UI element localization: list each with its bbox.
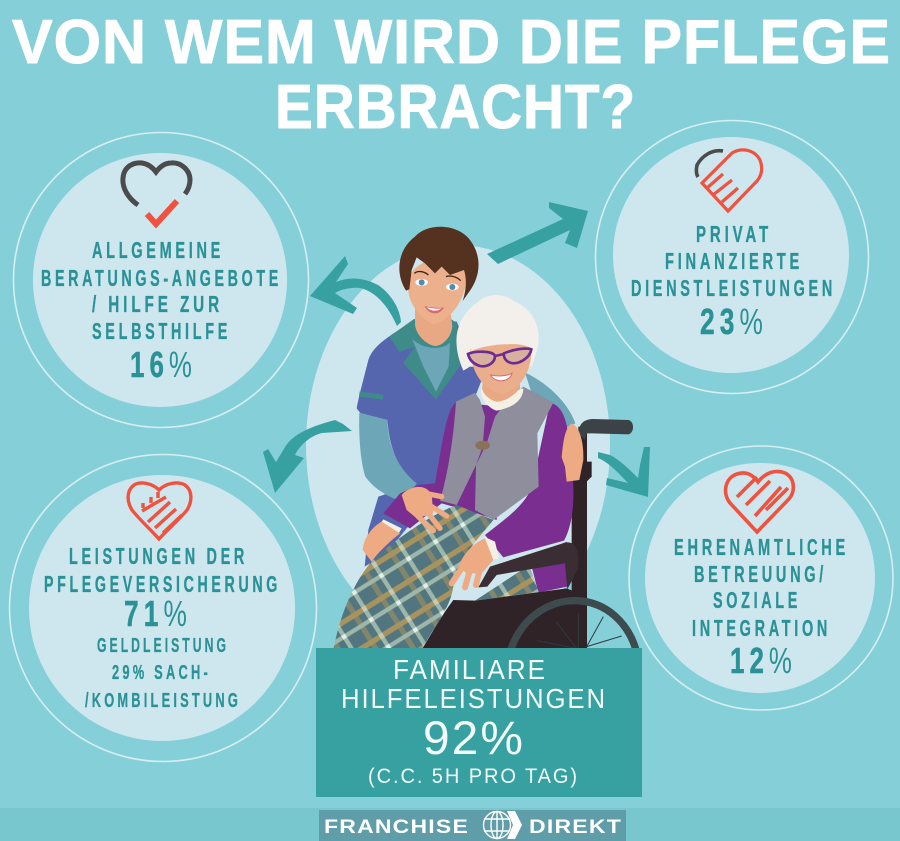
wheelchair frame <box>572 419 633 650</box>
title: ERBRACHT? <box>275 73 636 142</box>
text: privat finanzierte Dienstleistungen 23%: PRIVAT <box>696 221 772 247</box>
panel: Leistungen der Pflegeversicherung <box>10 454 316 762</box>
senior hair <box>456 295 539 371</box>
title: VON WEM WIRD DIE PFLEGE <box>12 8 891 77</box>
text: familiare Hilfeleistungen 92%: (C.C. 5H PRO TAG) <box>368 765 579 788</box>
senior blouse v and brooch <box>475 407 495 450</box>
text: privat finanzierte Dienstleistungen 23% <box>631 221 836 342</box>
text: familiare Hilfeleistungen 92%: 92% <box>423 711 525 764</box>
arrow: to lower left circle <box>263 420 352 493</box>
panel: privat finanzierte Dienstleistungen <box>596 120 868 394</box>
text: ehrenamtliche Betreuung 12% <box>674 534 849 681</box>
text: Leistungen der Pflegeversicherung 71%: 29% SACH- <box>112 662 211 684</box>
arrow: to upper left circle <box>310 256 401 326</box>
nurse sleeve band <box>359 394 383 397</box>
nurse neck <box>415 307 452 346</box>
text: Leistungen der Pflegeversicherung 71%: /KOMBILEISTUNG <box>85 690 241 712</box>
nurse face <box>408 259 467 325</box>
icon: heart with check mark <box>123 163 190 224</box>
text: allgemeine Beratungsangebote 16% <box>41 237 282 385</box>
nurse collar <box>389 319 461 399</box>
nurse right sleeve <box>525 373 575 428</box>
text: Leistungen der Pflegeversicherung 71%: PFLEGEVERSICHERUNG <box>44 571 281 597</box>
icon: heart with clasped hands <box>128 483 191 539</box>
text: allgemeine Beratungsangebote 16%: SELBSTHILFE <box>92 318 231 344</box>
logo: Franchise Direkt <box>319 810 626 841</box>
senior left sleeve and dress <box>383 402 500 528</box>
central oval backdrop <box>306 245 610 645</box>
text: allgemeine Beratungsangebote 16%: BERATUNGS-ANGEBOTE <box>41 265 282 291</box>
text: allgemeine Beratungsangebote 16%: 16% <box>130 344 197 385</box>
text: Leistungen der Pflegeversicherung 71% <box>44 543 281 712</box>
nurse undershirt <box>412 338 450 392</box>
senior mouth <box>491 373 512 381</box>
panel: allgemeine Beratungsangebote <box>14 132 308 428</box>
panel: familiäre Hilfeleistungen <box>316 648 642 797</box>
text: Leistungen der Pflegeversicherung 71%: LEISTUNGEN DER <box>69 543 248 569</box>
nurse hair <box>399 227 479 301</box>
panel: ehrenamtliche Betreuung <box>629 446 893 710</box>
senior hair fringe <box>470 323 533 352</box>
wheelchair seat <box>422 588 587 650</box>
arrow: to lower right circle <box>598 447 650 497</box>
wheelchair armrest <box>478 542 578 589</box>
nurse eyes and mouth <box>414 272 461 313</box>
hands and cuffs <box>363 423 583 587</box>
text: Leistungen der Pflegeversicherung 71%: 71% <box>124 593 192 634</box>
wheelchair wheel <box>511 601 636 650</box>
text: allgemeine Beratungsangebote 16%: / HILFE ZUR <box>92 291 223 317</box>
senior vest <box>440 387 553 520</box>
text: familiare Hilfeleistungen 92%: FAMILIARE <box>393 654 547 685</box>
senior neck <box>482 373 520 407</box>
senior face <box>470 343 532 394</box>
nurse left forearm <box>359 413 417 503</box>
arrow: to upper right circle <box>487 202 588 264</box>
senior collar <box>481 387 523 411</box>
title <box>12 8 891 142</box>
text: ehrenamtliche Betreuung 12%: 12% <box>730 640 797 681</box>
logo: Franchise Direkt: FRANCHISE <box>324 817 469 838</box>
text: privat finanzierte Dienstleistungen 23%: 23% <box>700 301 768 342</box>
text: familiare Hilfeleistungen 92%: HILFELEISTUNGEN <box>341 683 607 714</box>
senior lower dress <box>530 542 567 593</box>
text: ehrenamtliche Betreuung 12%: SOZIALE <box>713 587 801 613</box>
icon: globe and chevron <box>484 811 522 839</box>
illustration: nurse and senior in wheelchair <box>333 227 636 650</box>
senior glasses <box>468 349 531 366</box>
icon: striped heart <box>726 471 793 532</box>
footer band <box>0 808 900 841</box>
logo: Franchise Direkt: DIREKT <box>529 817 622 838</box>
blanket <box>333 505 539 650</box>
icon: half heart with hand <box>696 150 762 211</box>
senior right sleeve <box>485 403 573 557</box>
text: privat finanzierte Dienstleistungen 23%: FINANZIERTE <box>665 248 803 274</box>
nurse tunic <box>357 319 482 567</box>
text: allgemeine Beratungsangebote 16%: ALLGEMEINE <box>92 237 224 263</box>
text: familiare Hilfeleistungen 92% <box>341 654 607 788</box>
text: Leistungen der Pflegeversicherung 71%: GELDLEISTUNG <box>97 635 229 657</box>
